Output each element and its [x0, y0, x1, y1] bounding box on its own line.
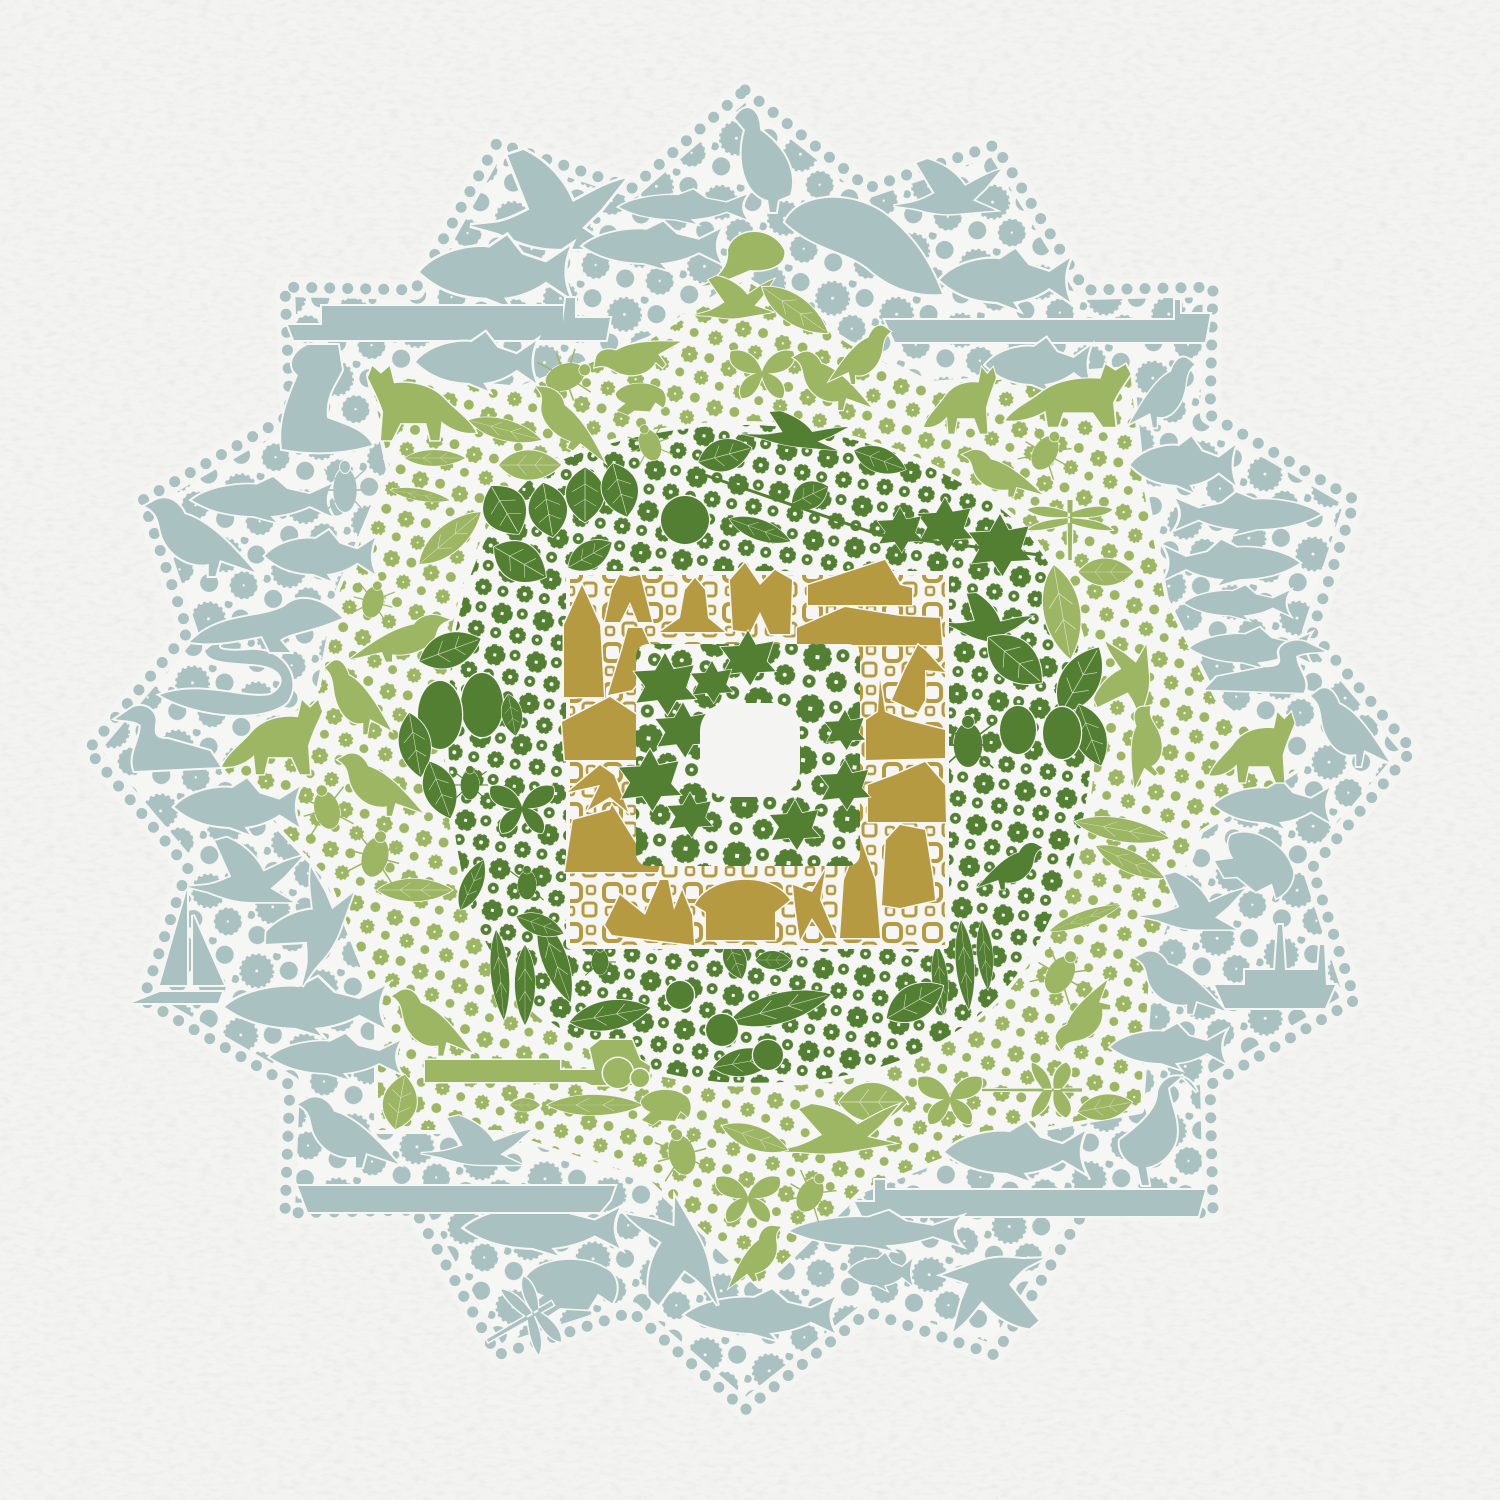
left tower [564, 585, 604, 697]
fox [368, 366, 476, 440]
mole [567, 993, 653, 1037]
two figures [605, 575, 652, 622]
gold square ring [570, 575, 945, 945]
athlete [793, 870, 836, 940]
flying duck [890, 153, 1004, 219]
bird right 1 [962, 450, 1042, 497]
dragonfly [469, 1271, 571, 1373]
leafy branch top left [473, 459, 645, 594]
wading bird left [298, 1097, 398, 1167]
musicians [882, 825, 935, 908]
pears and leaves [394, 623, 526, 824]
upright bird [1036, 562, 1088, 662]
church left [565, 805, 660, 872]
bird at right tip [1311, 688, 1389, 766]
fruit branch bottom [666, 937, 834, 1081]
gothic tower [840, 838, 880, 938]
wisteria [929, 919, 996, 1016]
beetle left 2 [297, 779, 355, 836]
bird 2 [793, 352, 871, 410]
bird 3 [829, 326, 891, 384]
gold silhouettes: buildings and people [562, 560, 946, 945]
flying bird bottom right [934, 1241, 1065, 1353]
fish bottom tip [685, 1289, 835, 1340]
apple [661, 496, 709, 544]
fish top right [940, 249, 1070, 310]
ship bottom left [298, 1186, 615, 1212]
wren [518, 382, 624, 465]
bat top right [754, 276, 836, 344]
bird left lower [451, 856, 493, 914]
large fish [420, 236, 570, 307]
cormorant [421, 1116, 531, 1165]
dragonfly lower right [982, 1062, 1082, 1118]
beetle right 2 [1078, 558, 1134, 586]
bat top [688, 266, 780, 326]
vole [702, 232, 784, 286]
newt [190, 599, 342, 652]
finch left [338, 754, 422, 816]
pike [619, 189, 747, 224]
frog bottom [526, 1260, 617, 1316]
beetle right [1016, 421, 1076, 481]
bullhead fish [945, 1122, 1085, 1181]
boat lower right [1215, 925, 1335, 1008]
vine leaves top [720, 630, 776, 686]
frog [1209, 821, 1304, 911]
bird lower right [1056, 980, 1110, 1050]
flying bird bottom [608, 1189, 733, 1333]
beetle [537, 344, 598, 408]
empty centre [700, 703, 800, 797]
bird on branch [694, 433, 756, 477]
weasel [1006, 364, 1130, 427]
bird 1 [590, 306, 683, 401]
fish lower right [1110, 1024, 1226, 1069]
partridge left [325, 660, 391, 734]
wading bird lower right [1135, 952, 1225, 1014]
swallow [1089, 638, 1153, 728]
mandala: outer water zone of blue-grey dots [88, 90, 1412, 1410]
beetle left 1 [345, 825, 406, 884]
beetle 2 [624, 418, 675, 468]
mouse [499, 450, 561, 480]
bird flying lower right [1140, 872, 1244, 930]
house right [868, 762, 946, 822]
fish left 2 [225, 977, 385, 1036]
blue silhouettes: fish, birds, boats [116, 108, 1389, 1373]
ivy leaf upper left [634, 653, 696, 715]
fish right 5 [1190, 628, 1310, 668]
barn top [808, 560, 912, 605]
gold rounded squares [570, 575, 945, 945]
stoat [411, 502, 489, 574]
barn lower [797, 607, 942, 645]
fish upper left 2 [265, 530, 375, 581]
branch with leaves top right [690, 439, 1040, 576]
beetle lower right [1028, 940, 1095, 1006]
fish right 2 [1176, 492, 1320, 535]
dark green silhouettes: fruit, leaves, creatures [394, 408, 1116, 1081]
beetle upper left [349, 576, 398, 623]
fish upper left [416, 332, 536, 391]
bird flying lower [768, 1089, 905, 1164]
perch [174, 779, 300, 834]
fish left 1 [270, 1034, 400, 1079]
middle zone: light green dot field [225, 280, 1295, 1285]
pavilion [695, 880, 790, 940]
vine leaves upper [691, 661, 733, 703]
workers [605, 880, 694, 945]
grasshopper left [389, 484, 451, 506]
swallow right [1073, 811, 1171, 849]
seated figure [608, 628, 652, 695]
rose bottom [770, 800, 820, 850]
church right [866, 680, 945, 760]
fish right 1 [1130, 437, 1236, 492]
windmill [660, 578, 725, 632]
dragonfly right [1028, 500, 1112, 560]
flying goose top left [470, 150, 626, 249]
fish right 3 [1164, 540, 1300, 585]
ship top right [885, 300, 1210, 342]
catfish [785, 198, 942, 294]
spider [940, 716, 996, 768]
eel [160, 640, 292, 715]
large flying bird [253, 861, 357, 992]
goose right upper [1130, 357, 1194, 427]
ptarmigan [924, 367, 996, 434]
butterfly lower [918, 1076, 982, 1124]
moth lower left [379, 1072, 421, 1132]
songbird lower left [392, 989, 472, 1056]
blackbird [978, 843, 1042, 890]
light green silhouettes: mammals, birds, insects [222, 232, 1294, 1290]
flying owl [742, 408, 849, 451]
fly bottom [781, 1163, 841, 1223]
pigeon top [735, 108, 792, 212]
fruit plant [975, 622, 1116, 771]
gold ring background [570, 575, 945, 945]
otter [1210, 712, 1294, 782]
beetle lower right 2 [1076, 1090, 1134, 1124]
leaf sprig right [820, 760, 870, 810]
beetle bottom [756, 951, 790, 969]
inner zone: dark green flower field [448, 425, 1091, 1083]
mole [378, 879, 452, 901]
bat [938, 588, 1035, 648]
fish [583, 222, 721, 269]
tractor with trailer [425, 1040, 650, 1088]
fish upper left 1 [192, 477, 332, 522]
willow [487, 907, 582, 1025]
bug [322, 461, 368, 513]
bird right 2 [1097, 701, 1186, 791]
inner dark green flower ring [619, 630, 870, 866]
butterfly top [730, 350, 794, 398]
sailboat [132, 890, 224, 1003]
running figure [892, 645, 945, 712]
duck at left tip [116, 706, 220, 771]
player [568, 765, 628, 812]
frog lower [641, 1090, 691, 1125]
dancers [730, 563, 792, 634]
ivy leaf bottom left [668, 792, 712, 838]
house left [562, 697, 637, 760]
grasshopper right [1047, 899, 1123, 937]
hedgehog [839, 1083, 907, 1121]
bee [509, 866, 545, 900]
fish upper right [986, 338, 1090, 391]
moth small [510, 1098, 540, 1112]
butterfly [490, 785, 554, 833]
fish right 4 [1184, 585, 1290, 620]
swimming duck right [1205, 641, 1325, 693]
roe deer [222, 700, 322, 774]
butterfly bottom [716, 1176, 780, 1222]
bird upper left tip [145, 498, 255, 576]
small beetle [584, 945, 616, 975]
goose lower right [1120, 1076, 1197, 1185]
fly [405, 450, 465, 466]
ship top left [288, 298, 610, 340]
fish right 6 [1214, 781, 1330, 828]
ivy leaf mid left [656, 702, 710, 758]
fish bottom 2 [848, 1253, 912, 1290]
middle zone dots [225, 280, 1295, 1285]
heron [188, 838, 302, 902]
fish bottom 1 [790, 1211, 960, 1250]
partridge bottom [714, 1222, 795, 1290]
beetle bottom [651, 1123, 712, 1182]
rodent [548, 1095, 642, 1115]
fish bottom left [464, 1200, 620, 1255]
bird right 3 [1092, 837, 1168, 887]
heron left [350, 615, 450, 662]
ivy leaf lower left [619, 749, 681, 811]
grasshopper [466, 411, 544, 449]
seal [281, 345, 372, 452]
crab [616, 383, 666, 415]
beetle left [452, 766, 488, 800]
ship bottom right [855, 1180, 1205, 1216]
owl [878, 971, 952, 1033]
crawler bird [718, 1115, 792, 1161]
sprig right upper [825, 710, 865, 750]
